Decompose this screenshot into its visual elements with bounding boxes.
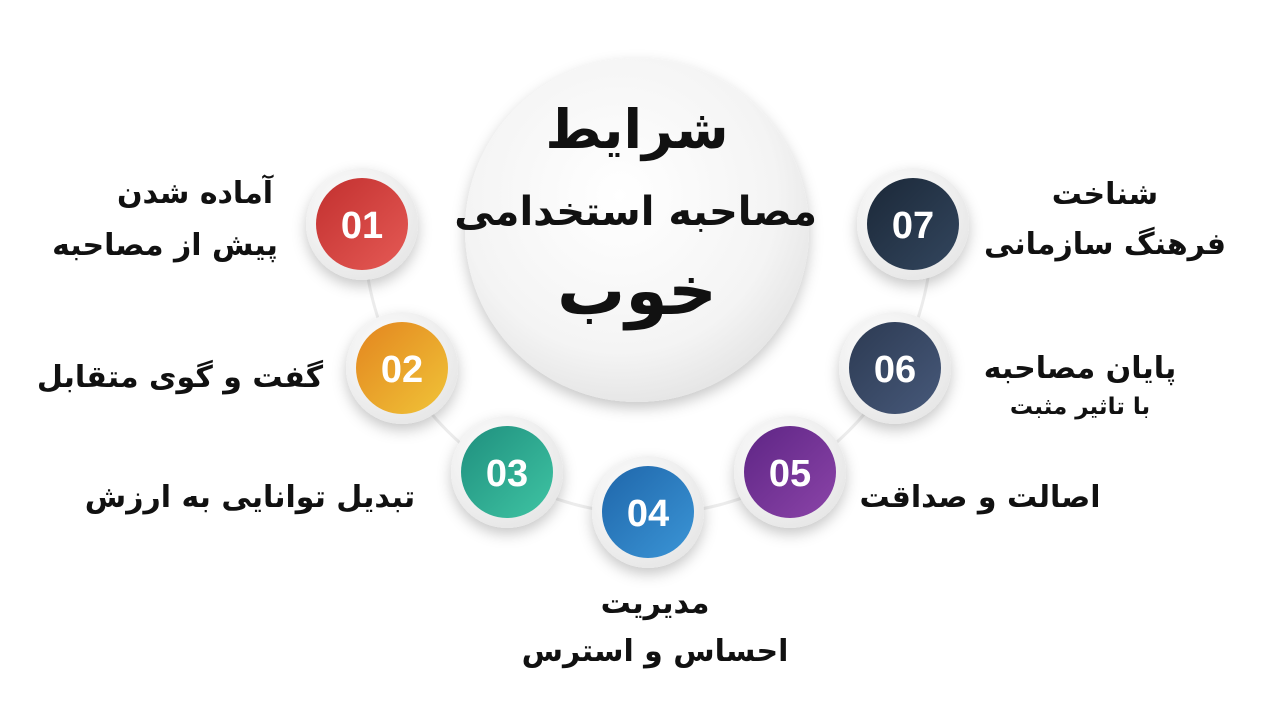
badge 02 — [346, 312, 458, 424]
label 06 — [984, 351, 1176, 420]
badge 03 — [451, 416, 563, 528]
label 01 — [52, 174, 278, 263]
label 07: شناخت — [1052, 177, 1158, 212]
title: مصاحبه استخدامی — [454, 189, 817, 235]
badge 01: 01 — [341, 205, 383, 247]
label 05: اصالت و صداقت — [859, 480, 1101, 515]
label 04: مدیریت — [601, 586, 709, 621]
label 06: با تاثیر مثبت — [1010, 394, 1150, 420]
label 04: احساس و استرس — [522, 634, 788, 669]
badge 06 — [839, 312, 951, 424]
badge 07: 07 — [892, 205, 934, 247]
label 07: فرهنگ سازمانی — [984, 227, 1226, 262]
label 03: تبدیل توانایی به ارزش — [85, 480, 415, 515]
label 06: پایان مصاحبه — [984, 351, 1176, 386]
badge 06: 06 — [874, 349, 916, 391]
badge 07 — [857, 168, 969, 280]
label 01: آماده شدن — [117, 176, 273, 211]
label 01: پیش از مصاحبه — [52, 228, 278, 263]
label 07 — [984, 177, 1226, 262]
badge 01 — [306, 168, 418, 280]
badge 05 — [734, 416, 846, 528]
badge 04: 04 — [627, 493, 669, 535]
badge 03: 03 — [486, 453, 528, 495]
badge 05: 05 — [769, 453, 811, 495]
label 02: گفت و گوی متقابل — [37, 360, 323, 395]
title: خوب — [557, 252, 717, 331]
badge 04 — [592, 456, 704, 568]
badge 02: 02 — [381, 349, 423, 391]
center circle — [465, 58, 809, 402]
title — [454, 98, 817, 331]
title: شرایط — [545, 98, 729, 161]
label 04 — [522, 586, 788, 669]
